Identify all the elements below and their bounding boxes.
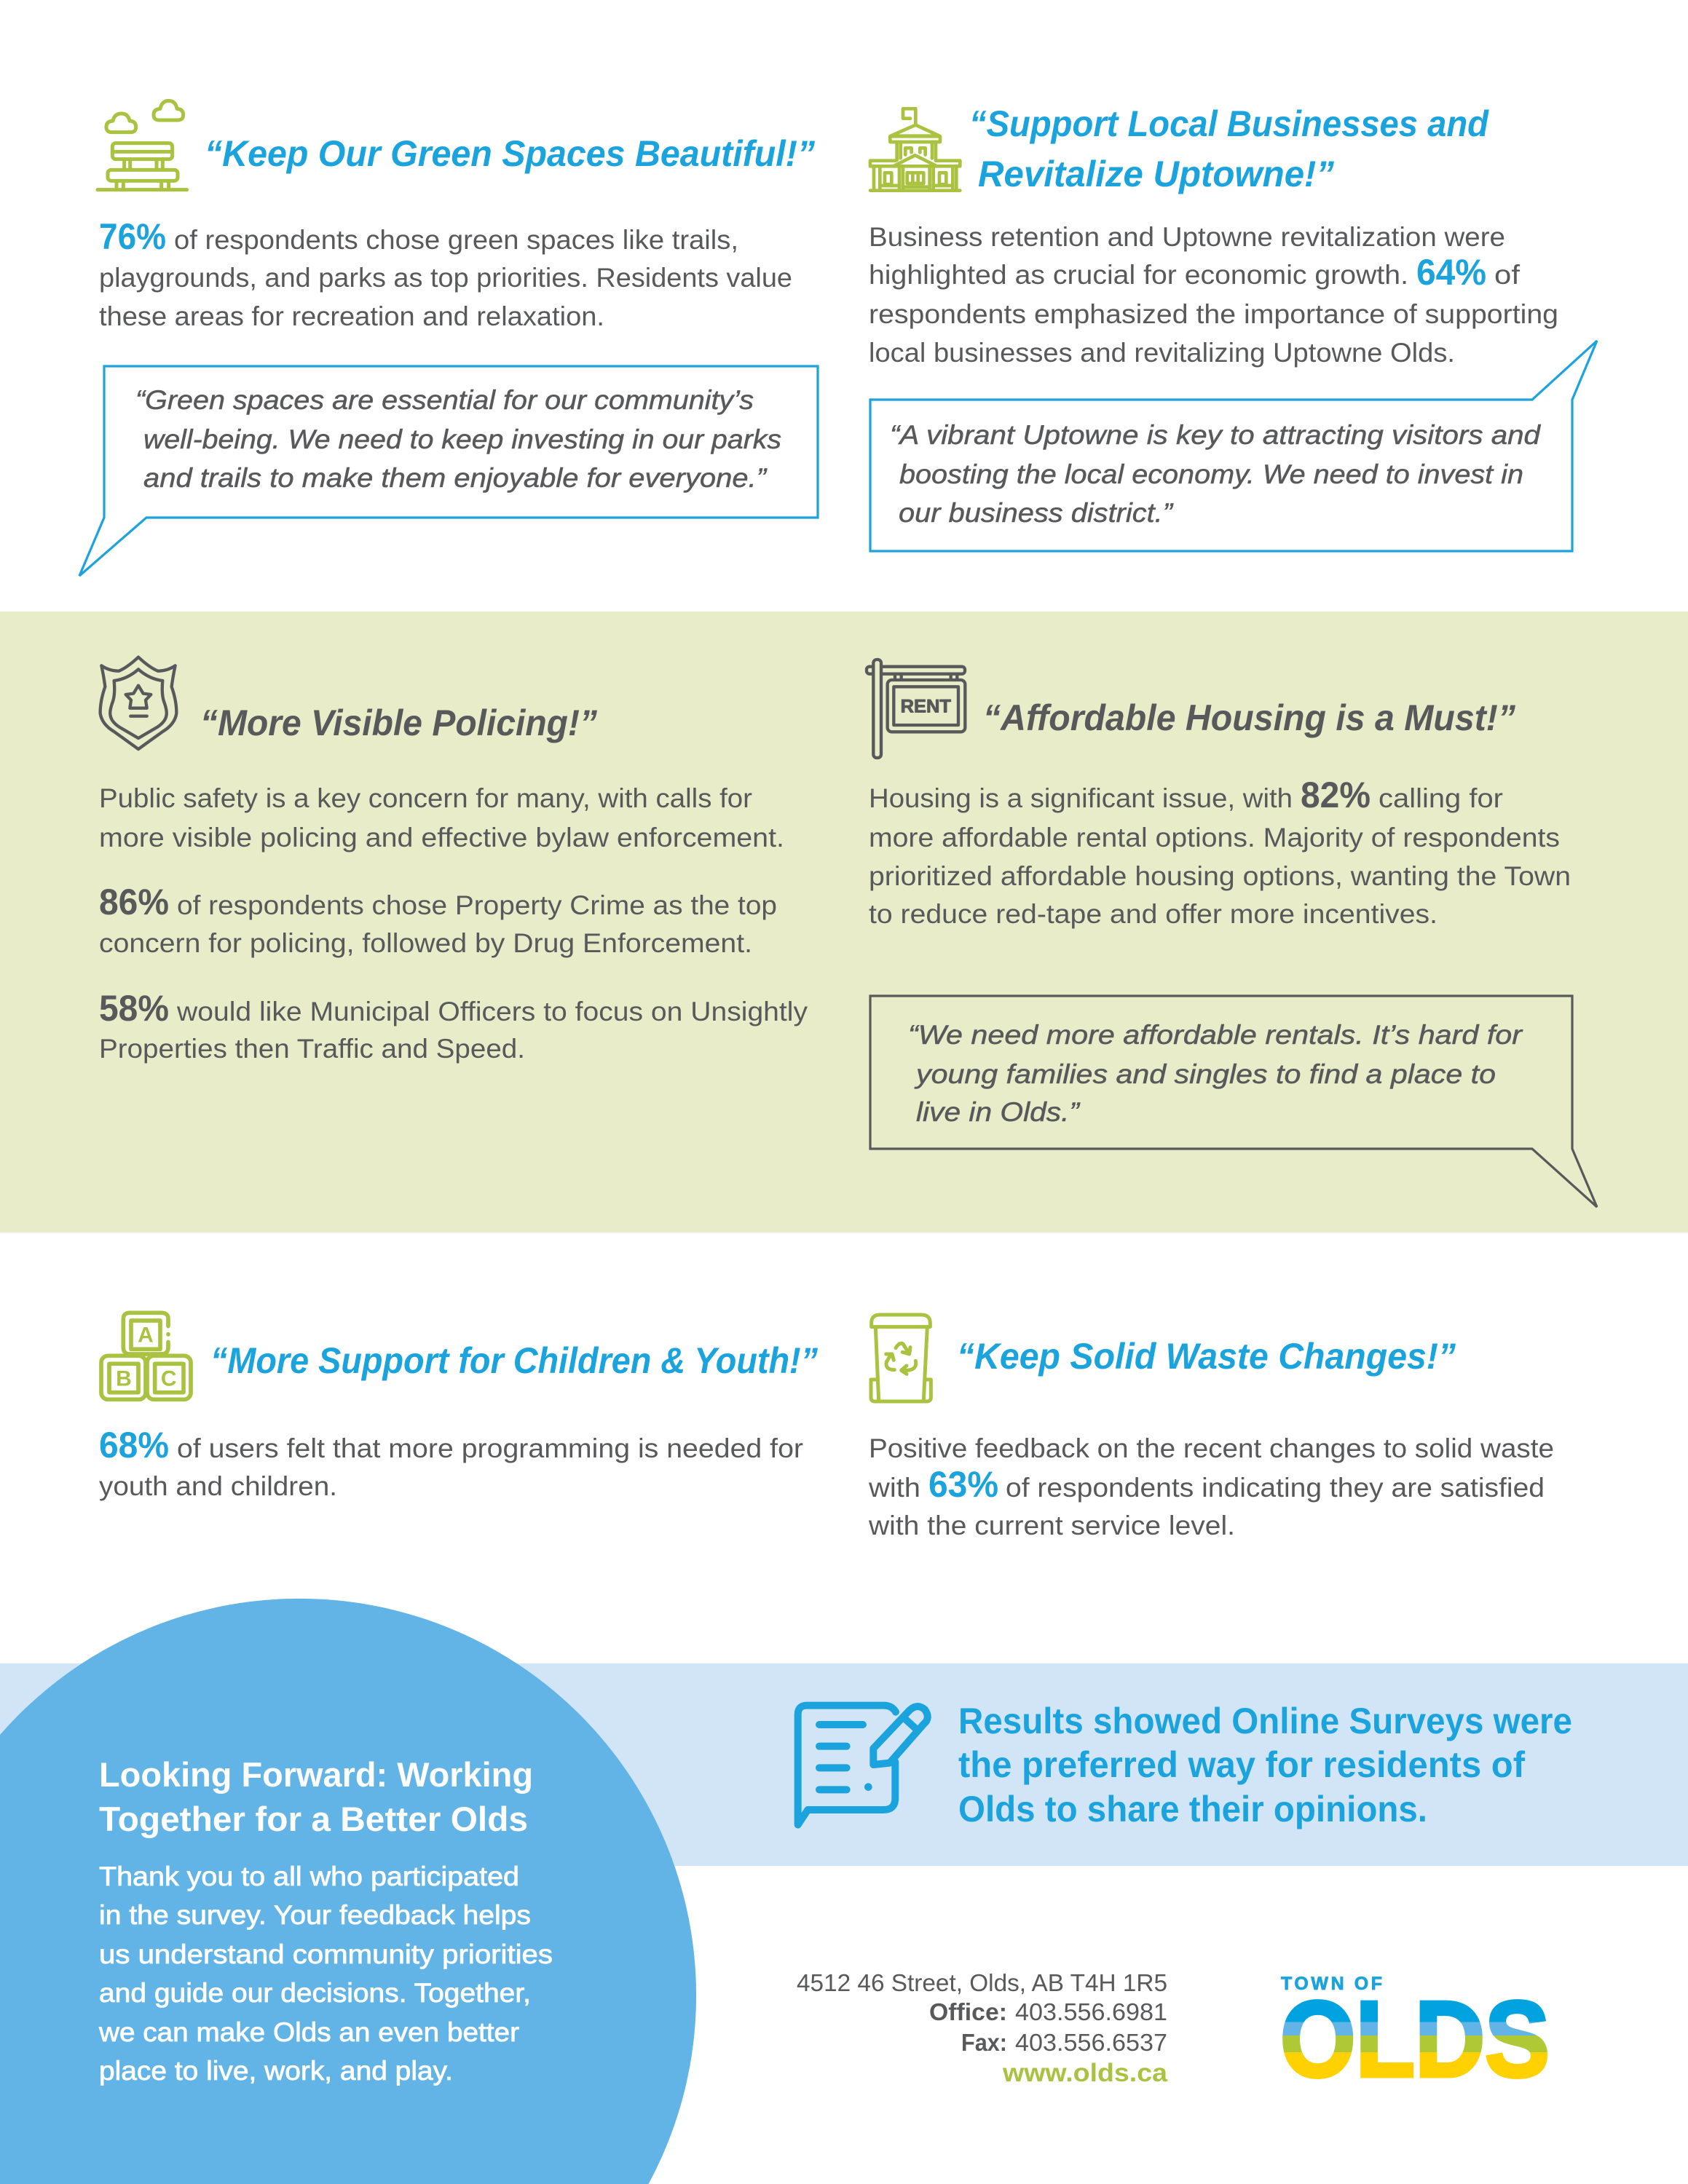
callout: online surveys result: Olds to share their opinions. <box>958 1789 1427 1829</box>
text block: business stats: Business retention and Uptowne revitalization were <box>869 222 1505 252</box>
callout: rentals quote: “We need more affordable rentals. It’s hard for <box>908 1020 1523 1050</box>
text block: municipal officers stat: 58% <box>99 988 169 1029</box>
text block: contact details: 403.556.6537 <box>1015 2029 1167 2056</box>
icon: rent sign <box>867 660 965 758</box>
icon: town hall <box>870 108 960 191</box>
callout: green spaces quote: well-being. We need to keep investing in our parks <box>143 424 781 454</box>
icon: alphabet blocks: C <box>161 1366 176 1390</box>
circle background <box>0 1599 696 2184</box>
text block: green spaces stats: of respondents chose green spaces like trails, <box>174 225 738 255</box>
text block: property crime stat: 86% <box>99 882 169 922</box>
logo: town of olds: OLDS <box>1280 1979 1550 2100</box>
logo: town of olds: TOWN OF <box>1281 1974 1382 1994</box>
text block: contact details: 403.556.6981 <box>1015 1998 1167 2025</box>
panel: local businesses <box>869 103 1597 551</box>
text block: property crime stat: of respondents chose Property Crime as the top <box>177 890 777 920</box>
heading: solid waste: “Keep Solid Waste Changes!” <box>957 1336 1456 1377</box>
text block: business stats: 64% <box>1416 252 1486 293</box>
heading: more visible policing: “More Visible Policing!” <box>200 703 597 743</box>
text block: business stats: highlighted as crucial for economic growth. <box>869 260 1408 290</box>
icon: police shield <box>100 657 176 749</box>
icon: park bench with clouds <box>98 100 187 190</box>
text block: thank you message: we can make Olds an even better <box>98 2017 519 2047</box>
text block: business stats: local businesses and revitalizing Uptowne Olds. <box>869 338 1455 368</box>
panel: solid waste <box>868 1315 1554 1540</box>
heading: keep our green spaces: “Keep Our Green Spaces Beautiful!” <box>205 133 815 174</box>
panel: affordable housing <box>867 660 1597 1207</box>
text block: municipal officers stat <box>99 988 808 1064</box>
text block: thank you message: in the survey. Your feedback helps <box>99 1900 531 1930</box>
callout: green spaces quote <box>79 366 818 576</box>
heading: support local businesses: “Support Local Businesses and <box>969 103 1489 144</box>
heading: looking forward: Looking Forward: Working <box>99 1755 533 1794</box>
text block: housing stats <box>869 775 1571 929</box>
callout: uptowne quote: boosting the local economy. We need to invest in <box>899 459 1523 489</box>
callout: online surveys result: the preferred way for residents of <box>958 1744 1525 1785</box>
text block: business stats <box>869 222 1558 368</box>
text block: contact details: Fax: <box>961 2029 1007 2056</box>
panel: green band background <box>0 612 1688 1233</box>
text block: property crime stat <box>99 882 777 958</box>
text block: thank you message <box>98 1861 553 2086</box>
icon: alphabet blocks: A <box>138 1324 154 1348</box>
text block: contact details: www.olds.ca <box>1002 2059 1168 2087</box>
heading: children and youth: “More Support for Children & Youth!” <box>210 1340 818 1381</box>
text block: green spaces stats: playgrounds, and parks as top priorities. Residents value <box>99 263 792 293</box>
text block: thank you message: and guide our decisions. Together, <box>99 1978 531 2008</box>
panel: visible policing <box>99 657 808 1064</box>
heading: looking forward: Together for a Better Olds <box>99 1800 528 1838</box>
text block: business stats: respondents emphasized the importance of supporting <box>869 299 1558 329</box>
text block: solid waste stats: with <box>868 1473 920 1503</box>
panel: children and youth <box>99 1313 818 1501</box>
text block: contact details <box>797 1969 1168 2087</box>
callout: uptowne quote <box>870 341 1597 551</box>
text block: housing stats: to reduce red-tape and offer more incentives. <box>869 899 1437 929</box>
text block: municipal officers stat: would like Municipal Officers to focus on Unsightly <box>176 997 808 1026</box>
text block: thank you message: place to live, work, and play. <box>99 2056 453 2086</box>
panel: light blue band <box>0 1663 1688 1866</box>
icon: recycling bin <box>871 1315 931 1401</box>
text block: contact details: 4512 46 Street, Olds, AB T4H 1R5 <box>797 1969 1167 1996</box>
text block: housing stats: 82% <box>1301 775 1370 815</box>
icon: survey speech bubble with pencil <box>798 1706 928 1825</box>
text block: green spaces stats: 76% <box>99 216 166 257</box>
callout: green spaces quote: “Green spaces are essential for our community’s <box>135 385 754 415</box>
callout: rentals quote <box>870 996 1597 1207</box>
callout: uptowne quote: our business district.” <box>899 498 1174 528</box>
text block: youth programming stat: 68% <box>99 1425 169 1465</box>
text block: solid waste stats: 63% <box>928 1464 998 1505</box>
text block: youth programming stat <box>99 1425 803 1501</box>
heading: affordable housing: “Affordable Housing is a Must!” <box>983 697 1515 738</box>
callout: rentals quote: live in Olds.” <box>916 1097 1081 1127</box>
icon: rent sign: RENT <box>901 696 952 716</box>
text block: youth programming stat: youth and children. <box>99 1471 337 1501</box>
text block: solid waste stats: Positive feedback on the recent changes to solid waste <box>869 1433 1554 1463</box>
callout: rentals quote: young families and singles to find a place to <box>914 1059 1496 1089</box>
text block: solid waste stats: with the current service level. <box>868 1511 1235 1540</box>
text block: solid waste stats <box>868 1433 1554 1540</box>
text block: thank you message: Thank you to all who participated <box>99 1861 519 1891</box>
text block: housing stats: calling for <box>1379 783 1503 813</box>
callout: online surveys result: Results showed Online Surveys were <box>958 1701 1572 1741</box>
panel: green spaces <box>79 100 818 576</box>
text block: green spaces stats <box>99 216 792 331</box>
text block: youth programming stat: of users felt that more programming is needed for <box>177 1433 803 1463</box>
text block: public safety <box>99 783 784 852</box>
heading: looking forward <box>99 1755 533 1838</box>
text block: housing stats: prioritized affordable housing options, wanting the Town <box>869 861 1571 891</box>
text block: thank you message: us understand community priorities <box>99 1939 553 1969</box>
text block: green spaces stats: these areas for recreation and relaxation. <box>99 301 604 331</box>
text block: housing stats: Housing is a significant issue, with <box>869 783 1293 813</box>
text block: property crime stat: concern for policing, followed by Drug Enforcement. <box>99 928 752 958</box>
heading: support local businesses: Revitalize Uptowne!” <box>978 154 1334 194</box>
text block: public safety: more visible policing and effective bylaw enforcement. <box>99 823 784 852</box>
heading: support local businesses <box>969 103 1489 194</box>
text block: public safety: Public safety is a key concern for many, with calls for <box>99 783 752 813</box>
text block: solid waste stats: of respondents indicating they are satisfied <box>1006 1473 1545 1503</box>
text block: housing stats: more affordable rental options. Majority of respondents <box>869 823 1560 852</box>
icon: alphabet blocks <box>101 1313 191 1399</box>
panel: looking forward circle <box>0 1599 696 2184</box>
callout: online surveys result <box>958 1701 1572 1829</box>
callout: green spaces quote: and trails to make them enjoyable for everyone.” <box>143 463 768 493</box>
text block: contact details: Office: <box>929 1998 1007 2025</box>
text block: municipal officers stat: Properties then Traffic and Speed. <box>99 1034 525 1064</box>
callout: uptowne quote: “A vibrant Uptowne is key to attracting visitors and <box>890 420 1542 450</box>
icon: alphabet blocks: B <box>116 1366 132 1390</box>
text block: business stats: of <box>1494 260 1521 290</box>
